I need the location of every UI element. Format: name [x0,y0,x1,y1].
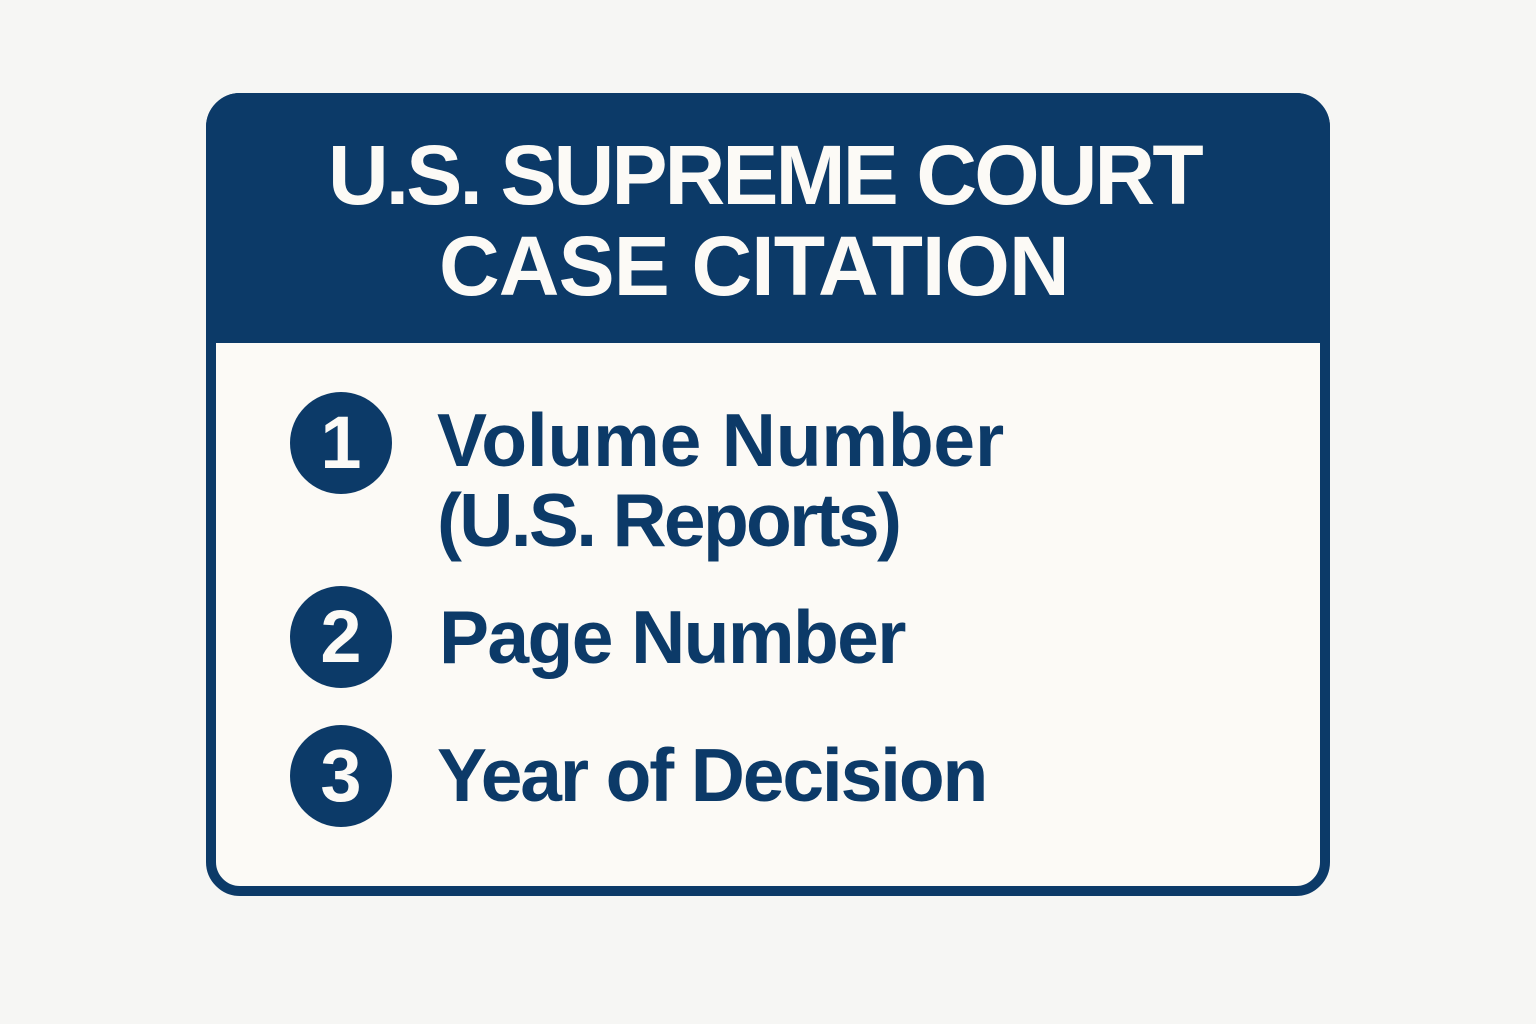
label: volume number line 1: Volume Number [437,398,1004,482]
icon: number 3 [290,725,392,827]
header band [206,93,1330,343]
panel: citation card [206,93,1330,896]
label: volume number line 2: (U.S. Reports) [437,478,899,562]
icon: number 2: 2 [320,595,362,678]
label: page number: Page Number [439,595,905,679]
icon: number 2 [290,586,392,688]
icon: number 1 [290,392,392,494]
label: year of decision: Year of Decision [437,733,986,817]
title line 2: CASE CITATION [439,219,1069,313]
icon: number 3: 3 [320,734,362,817]
title line 1: U.S. SUPREME COURT [328,128,1201,222]
icon: number 1: 1 [320,401,362,484]
